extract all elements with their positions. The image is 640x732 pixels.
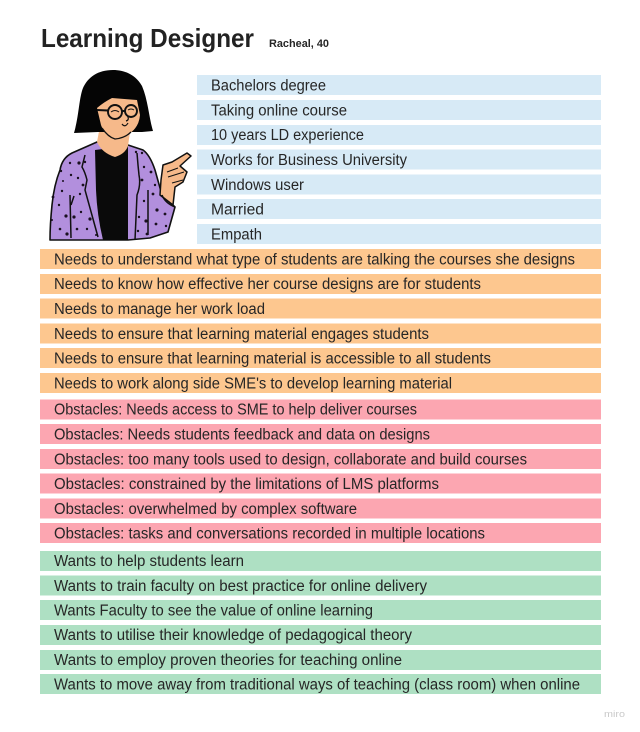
fact: 10 years LD experience xyxy=(211,127,364,144)
fact xyxy=(197,100,601,120)
want xyxy=(40,600,601,620)
fact xyxy=(197,224,601,244)
fact xyxy=(197,75,601,95)
need: Needs to know how effective her course designs are for students xyxy=(54,276,481,293)
need: Needs to ensure that learning material is accessible to all students xyxy=(54,350,491,368)
want: Wants to help students learn xyxy=(54,553,244,570)
fact xyxy=(197,125,601,145)
fact xyxy=(197,150,601,170)
subtitle: name and age: Racheal, 40 xyxy=(269,38,329,50)
illustration: learning designer pointing xyxy=(50,70,191,240)
want: Wants Faculty to see the value of online learning xyxy=(54,602,373,620)
obstacle: Obstacles: overwhelmed by complex software xyxy=(54,501,357,518)
fact xyxy=(197,199,601,219)
jacket details xyxy=(70,153,175,240)
obstacle xyxy=(40,523,601,543)
obstacle: Obstacles: tasks and conversations recorded in multiple locations xyxy=(54,526,485,542)
need: Needs to understand what type of students are talking the courses she designs xyxy=(54,252,575,268)
want xyxy=(40,625,601,645)
fact: Bachelors degree xyxy=(211,78,326,94)
obstacle: Obstacles: constrained by the limitations of LMS platforms xyxy=(54,476,439,493)
neck and shirt xyxy=(95,146,128,240)
watermark: miro: miro xyxy=(604,709,625,719)
fact: Married xyxy=(211,202,264,218)
obstacle xyxy=(40,474,601,494)
fact: Empath xyxy=(211,226,262,244)
face xyxy=(97,98,140,138)
glasses xyxy=(97,105,137,126)
need xyxy=(40,274,601,294)
panel: profile facts xyxy=(197,75,601,244)
panel: needs xyxy=(40,249,601,393)
obstacle: Obstacles: Needs students feedback and data on designs xyxy=(54,426,430,444)
panel: wants xyxy=(40,551,601,694)
need xyxy=(40,373,601,393)
obstacle xyxy=(40,424,601,444)
want xyxy=(40,576,601,596)
want: Wants to train faculty on best practice for online delivery xyxy=(54,578,427,595)
need xyxy=(40,348,601,368)
want: Wants to utilise their knowledge of pedagogical theory xyxy=(54,627,412,644)
fact: Windows user xyxy=(211,177,304,194)
want: Wants to employ proven theories for teaching online xyxy=(54,652,402,669)
obstacle: Obstacles: Needs access to SME to help deliver courses xyxy=(54,402,417,418)
jacket xyxy=(50,142,175,240)
want: Wants to move away from traditional ways of teaching (class room) when online xyxy=(54,676,580,694)
obstacle xyxy=(40,498,601,518)
need: Needs to ensure that learning material engages students xyxy=(54,326,429,343)
panel: obstacles xyxy=(40,400,601,543)
need xyxy=(40,298,601,318)
want xyxy=(40,551,601,571)
title: Learning Designer xyxy=(41,23,254,53)
obstacle xyxy=(40,400,601,420)
hand xyxy=(160,153,191,205)
need: Needs to manage her work load xyxy=(54,301,265,318)
fact: Works for Business University xyxy=(211,152,407,169)
want xyxy=(40,650,601,670)
fact xyxy=(197,174,601,194)
jacket dots xyxy=(51,151,167,236)
fact: Taking online course xyxy=(211,102,347,120)
hair xyxy=(74,70,153,133)
need: Needs to work along side SME's to develop learning material xyxy=(54,376,452,392)
need xyxy=(40,324,601,344)
obstacle: Obstacles: too many tools used to design, collaborate and build courses xyxy=(54,452,527,468)
